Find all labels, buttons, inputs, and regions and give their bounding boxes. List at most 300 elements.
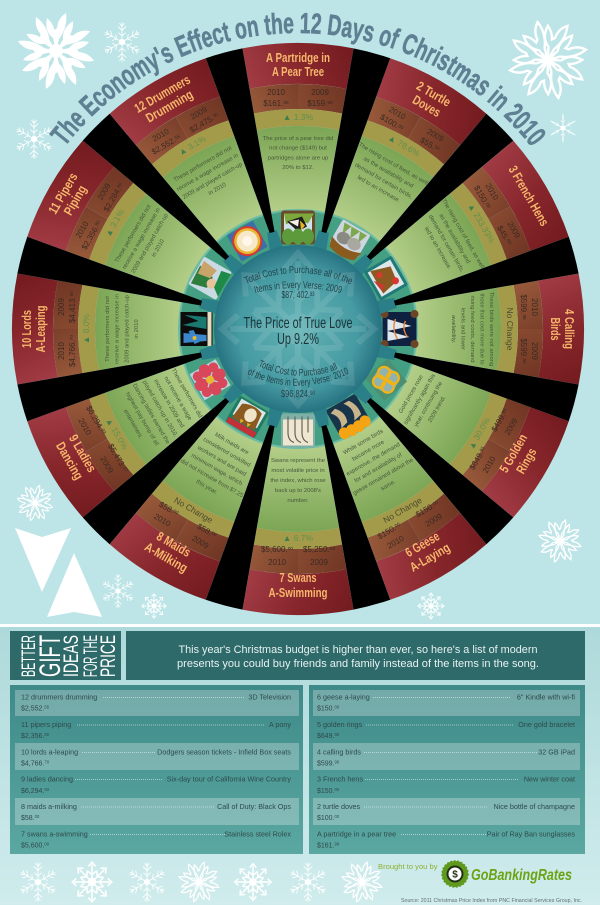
icon: drum: [227, 221, 268, 262]
row: 6 geese: $150.: [317, 706, 335, 712]
prices: 00: [210, 530, 218, 539]
label: A-Laying: [407, 540, 453, 575]
description: workers and are paid: [195, 445, 247, 478]
prices: [263, 88, 333, 108]
icon: calling birds: [380, 310, 418, 348]
row: 7 swans: 00: [44, 842, 50, 846]
label: [19, 305, 48, 352]
icon: dancing ladies: [187, 357, 233, 403]
row: 12 drummers: 12 drummers drumming: [21, 692, 97, 702]
description: considered unskilled: [202, 437, 251, 469]
row: 3 hens: New winter coat: [524, 774, 575, 784]
prices: $100.: [378, 112, 400, 130]
row: partridge: 99: [335, 842, 340, 846]
row: 3 hens: $150.: [317, 788, 335, 795]
label: A-Milking: [142, 539, 190, 575]
prices: 2010: [268, 558, 286, 567]
prices: 2010: [387, 105, 408, 122]
prices: 99: [283, 100, 289, 106]
description: [174, 424, 265, 508]
row: 5 rings: $649.: [317, 733, 335, 740]
prices: 00: [484, 202, 492, 210]
snowflakes: bottom row: [19, 862, 382, 902]
percent change: No Change: [505, 307, 515, 351]
prices: 00: [432, 499, 440, 507]
prices: 2010: [481, 454, 498, 475]
description: significantly again this: [403, 373, 437, 426]
row: 2 doves: 00: [335, 814, 340, 819]
prices: 80: [116, 181, 124, 189]
prices: [151, 500, 218, 552]
gift list: left column: [10, 685, 303, 854]
prices: 2010: [152, 512, 173, 529]
label: [407, 78, 454, 122]
description: Dancing ladies earned the: [131, 383, 171, 446]
prices: $2,284.: [102, 186, 123, 213]
central headline: The Price of True Love: [244, 315, 353, 332]
description: minimum wage, which: [190, 453, 243, 487]
row: 12 drummers: $2,552.: [21, 706, 44, 712]
central headline: [244, 315, 353, 348]
label: [496, 431, 543, 483]
row: 4 birds: [317, 748, 575, 768]
row: 7 swans: 7 swans a-swimming: [21, 830, 88, 838]
prices: [376, 499, 447, 552]
label: Birds: [548, 318, 563, 340]
description: Gold prices rose: [398, 374, 425, 415]
prices: 00: [330, 546, 335, 552]
label: 12 Drummers: [132, 72, 193, 116]
description: 2009 trend.: [427, 395, 448, 424]
description: entertainers.: [122, 409, 144, 440]
description: year, continuing the: [413, 380, 445, 428]
prices: $5,600.: [261, 545, 288, 554]
percent change: ▲ 6.7%: [283, 533, 314, 543]
description: highest pay bump of all: [124, 392, 159, 447]
prices: 30: [212, 112, 220, 120]
prices: $599.: [519, 338, 528, 358]
prices: $4,413.: [68, 296, 77, 323]
description: [415, 198, 485, 284]
row: 8 maids: [21, 802, 291, 822]
heading block: better gift ideas: [10, 631, 121, 680]
row: 3 hens: [317, 774, 575, 795]
icon: partridge and pears: [281, 210, 315, 244]
prices: 2009: [57, 298, 66, 316]
description: increase in 2009 and: [152, 379, 185, 429]
row: 2 doves: 2 turtle doves: [317, 802, 361, 811]
prices: 93: [99, 428, 107, 436]
prices: 95: [501, 407, 509, 415]
segment: 12 Drummers Drumming: [107, 54, 303, 282]
percent change: ▲ 8.0%: [81, 313, 91, 344]
description: in 2010: [208, 182, 228, 197]
row: 8 maids: $58.: [21, 815, 35, 822]
row: 5 rings: 95: [335, 732, 340, 737]
prices: $4,766.: [68, 340, 77, 367]
row: 4 birds: 96: [335, 760, 340, 764]
prices: 2009: [190, 534, 211, 551]
prices: $5,250.: [303, 545, 330, 554]
prices: 2010: [57, 342, 66, 360]
prices: 80: [94, 219, 102, 227]
total cost 2010: $96,824.: [281, 389, 320, 400]
wheel: [12, 42, 584, 616]
description: [171, 144, 249, 210]
label: 9 Ladies: [66, 432, 100, 475]
label: 11 Pipers: [45, 170, 81, 216]
row: 11 pipers: A pony: [269, 720, 291, 729]
percent change: ▲ 233.33%: [466, 201, 497, 245]
icon ring base: [177, 208, 419, 450]
row: 2 doves: [317, 802, 575, 822]
prices: 96: [521, 314, 527, 320]
prices: 2010: [151, 127, 171, 144]
prices: [145, 101, 221, 157]
segment: A Partridge in a Pear Tree: [242, 43, 354, 244]
description: These performers did not: [173, 145, 233, 184]
description: [395, 368, 454, 436]
segment: 8 Maids A-Milking: [107, 376, 303, 604]
row: 9 ladies: 93: [44, 787, 50, 792]
prices: $150.: [472, 184, 490, 206]
row: 12 drummers: [21, 692, 291, 712]
heading block: better gift ideas: IDEAS: [60, 635, 83, 677]
description: this year.: [195, 479, 219, 496]
segment: 7 Swans A-Swimming: [242, 414, 354, 615]
label: [132, 72, 200, 128]
description: led to an increase.: [356, 175, 401, 204]
description: those that cost more due to: [478, 293, 484, 365]
description: as the availability and: [362, 156, 414, 190]
row: partridge: Pair of Ray Ban sunglasses: [487, 830, 575, 838]
row: partridge: A partridge in a pear tree: [317, 830, 396, 838]
row: 10 lords: 10 lords a-leaping: [21, 748, 78, 756]
description: [263, 136, 333, 171]
label: [53, 432, 100, 482]
row: 4 birds: 4 calling birds: [317, 748, 361, 756]
label: Dancing: [53, 439, 87, 482]
row: 2 doves: Nice bottle of champagne: [493, 802, 575, 811]
description: These performers did: [170, 368, 203, 419]
segment: 5 Golden Rings: [342, 322, 573, 520]
icon: french hens: [364, 256, 408, 301]
prices: 60: [69, 291, 75, 296]
prices: 00: [172, 508, 180, 517]
bottom section background: [0, 624, 600, 905]
heading block: better gift ideas: PRICE: [97, 635, 120, 677]
prices: 2010: [386, 534, 406, 551]
prices: $2,475.: [188, 113, 216, 135]
prices: $161.: [263, 99, 283, 108]
percent change: ▲ 3.1%: [103, 207, 126, 239]
row: 5 rings: [317, 720, 575, 740]
label: [142, 526, 198, 575]
label: 8 Maids: [154, 528, 194, 560]
intro banner: presents you could buy friends and family instead of the items in the song.: [177, 658, 539, 670]
description: levels and lower: [460, 308, 466, 350]
row: 9 ladies: [21, 774, 291, 795]
label: [45, 170, 93, 223]
row: 9 ladies: Six-day tour of California Wine Country: [167, 774, 291, 784]
description: The price of a pear tree did: [263, 136, 333, 142]
logo: GoBankingRates: [442, 861, 572, 887]
segment: 4 Calling Birds: [380, 274, 584, 384]
prices: 2009: [310, 558, 328, 567]
total cost 2009: 83: [310, 292, 315, 298]
description: [450, 292, 494, 366]
central headline: Up 9.2%: [277, 331, 319, 348]
description: partridges alone are up: [268, 155, 329, 161]
label: A-Leaping: [33, 305, 48, 352]
label: [399, 527, 453, 575]
description: did not increase from $7.25: [179, 458, 245, 500]
total cost 2010: Total Cost to Purchase all: [260, 360, 338, 376]
row: 6 geese: 6" Kindle with wi-fi: [517, 692, 575, 702]
prices: 96: [521, 358, 527, 364]
description: 20% to $12.: [282, 165, 314, 171]
row: 7 swans: [21, 830, 291, 850]
total cost 2010: of the Items in Every Verse: 2010: [248, 368, 348, 388]
prices: 2009: [505, 220, 522, 240]
icon: leaping lords: [180, 312, 212, 346]
prices: 2010: [530, 298, 539, 316]
prices: 2009: [424, 512, 444, 529]
prices: 00: [505, 238, 513, 246]
label: 4 Calling: [562, 309, 577, 349]
label: A-Swimming: [268, 585, 328, 600]
logo: GoBankingRates: GoBankingRates: [471, 867, 572, 884]
centre disc: [214, 245, 382, 413]
prices: 2010: [267, 88, 285, 97]
description: became more: [351, 439, 386, 463]
description: demand for certain birds,: [427, 214, 465, 274]
percent change: No Change: [172, 495, 215, 525]
description: [270, 458, 326, 504]
brought to you by: Brought to you by: [378, 862, 438, 871]
row: 3 hens: 3 French hens: [317, 774, 363, 784]
percent change: ▲ 3.1%: [176, 133, 208, 157]
segment: 3 French Hens: [344, 138, 573, 334]
prices: $2,552.: [150, 135, 178, 157]
total cost 2010: 90: [310, 391, 315, 397]
prices: $2,356.: [80, 224, 101, 251]
label: 2 Turtle: [414, 78, 454, 110]
prices: [378, 103, 447, 154]
heading block: better gift ideas: FOR THE: [81, 635, 102, 677]
icon: golden rings: [360, 353, 412, 406]
row: 4 birds: $599.: [317, 760, 335, 768]
row: 10 lords: 70: [44, 760, 50, 764]
prices: 2009: [503, 416, 520, 437]
description: geese remained about the: [352, 457, 415, 497]
prices: 2010: [74, 219, 91, 240]
prices: 55: [174, 134, 182, 142]
row: 11 pipers: 11 pipers piping: [21, 720, 71, 729]
prices: $58.: [157, 500, 175, 515]
percent change: ▲ 30.0%: [466, 416, 492, 451]
label: Rings: [513, 445, 539, 476]
label: 5 Golden: [496, 431, 530, 475]
percent change: ▲ 78.6%: [386, 132, 422, 159]
prices: [519, 294, 539, 364]
label: A Partridge in: [266, 50, 330, 65]
row: partridge: [317, 830, 575, 850]
prices: $499.: [490, 412, 508, 433]
prices: $649.: [468, 450, 486, 472]
segment: 9 Ladies Dancing: [23, 323, 253, 520]
label: 10 Lords: [19, 310, 34, 348]
row: 6 geese: 00: [335, 704, 340, 710]
heading block: better gift ideas: GIFT: [34, 635, 67, 677]
description: availability.: [450, 315, 456, 344]
row: 6 geese: [317, 692, 575, 712]
prices: 00: [288, 546, 293, 552]
row: 12 drummers: 3D Television: [248, 692, 291, 702]
description: back up to 2008's: [275, 488, 321, 494]
description: most volatile price in: [271, 468, 325, 474]
label: [266, 50, 330, 79]
row: 10 lords: $4,766.: [21, 760, 44, 768]
segment: 11 Pipers Piping: [23, 138, 252, 334]
prices: $150.: [414, 501, 436, 519]
title: The Economy's Effect on the 12 Days of Christmas in 2010: [49, 12, 546, 145]
row: 2 doves: $100.: [317, 815, 335, 822]
description: in 2010: [134, 319, 140, 339]
row: 8 maids: 8 maids a-milking: [21, 802, 77, 811]
prices: [57, 291, 77, 367]
row: partridge: $161.: [317, 842, 335, 850]
row: 12 drummers: 55: [44, 704, 50, 710]
prices: $45.: [495, 224, 511, 242]
description: [113, 362, 206, 456]
segment: 6 Geese A-Laying: [292, 374, 489, 604]
description: demand for certain birds,: [354, 162, 413, 200]
description: not receive a wage: [162, 376, 193, 422]
segment: 2 Turtle Doves: [292, 54, 489, 284]
description: as the availability and: [437, 213, 471, 265]
row: 8 maids: Call of Duty: Black Ops: [217, 802, 291, 811]
prices: $58.: [195, 522, 213, 537]
label: 3 French Hens: [506, 163, 552, 229]
label: [548, 309, 577, 349]
label: 7 Swans: [280, 570, 316, 585]
total cost 2009: Items in Every Verse: 2009: [254, 281, 342, 293]
description: 2009 and played catch-up: [131, 212, 170, 275]
row: 10 lords: Dodgers season tickets - Infield Box seats: [157, 748, 291, 756]
source note: Source: 2011 Christmas Price Index from PNC Financial Services Group, Inc.: [401, 898, 582, 904]
row: 8 maids: 00: [35, 814, 40, 819]
description: number.: [287, 498, 309, 504]
snowflakes: top and around the wheel: [15, 13, 595, 619]
description: played catch-up in 2010.: [141, 380, 178, 439]
description: Swans represent the: [271, 458, 326, 464]
label: Drumming: [143, 86, 196, 125]
description: [105, 294, 140, 364]
description: Milk maids are: [214, 432, 250, 457]
prices: $5,473.: [106, 442, 127, 470]
prices: 00: [394, 521, 402, 529]
description: These performers did not: [105, 296, 111, 362]
total cost 2010: [248, 360, 348, 400]
logo: GoBankingRates: $: [452, 870, 458, 880]
description: the index, which rose: [270, 478, 326, 484]
prices: 07: [121, 466, 129, 474]
icon: cow and milking: [225, 395, 269, 438]
description: The rising cost of feed, as well: [357, 142, 429, 187]
row: 7 swans: $5,600.: [21, 842, 44, 850]
description: not change ($149) but: [269, 146, 327, 152]
description: expensive, the demand: [346, 442, 401, 478]
row: 3 hens: 00: [335, 787, 340, 792]
description: in 2010: [151, 238, 166, 258]
prices: $6,294.: [84, 404, 105, 432]
row: 4 birds: 32 GB iPad: [538, 748, 575, 756]
arrows: white notched triangles: [15, 528, 102, 617]
prices: 2009: [98, 455, 115, 475]
prices: 70: [69, 335, 75, 340]
label: 6 Geese: [402, 528, 442, 560]
total cost 2009: [244, 266, 352, 301]
row: 9 ladies: 9 ladies dancing: [21, 774, 73, 784]
prices: 2009: [96, 181, 113, 202]
icon: geese and eggs: [325, 393, 373, 442]
description: led to an increase.: [423, 226, 452, 271]
description: rising feed costs, demand: [469, 295, 475, 363]
prices: 2010: [76, 417, 93, 437]
prices: 99: [433, 144, 441, 152]
label: A Pear Tree: [272, 64, 324, 79]
description: [332, 422, 420, 505]
prices: $159.: [307, 99, 327, 108]
percent change: ▲ 15.0%: [104, 416, 130, 451]
row: 11 pipers: 80: [44, 732, 50, 737]
gift list: right column: [309, 685, 585, 854]
description: These performers did not: [114, 204, 153, 264]
prices: [472, 178, 523, 247]
icon: swans: [281, 414, 315, 448]
prices: $150.: [376, 523, 398, 541]
row: 7 swans: Stainless steel Rolex: [224, 830, 291, 838]
prices: [73, 404, 130, 481]
description: These birds were not among: [488, 292, 494, 366]
row: 5 rings: One gold bracelet: [518, 720, 575, 729]
black wedges between segments: [17, 48, 579, 610]
prices: $599.: [519, 294, 528, 314]
label: Doves: [410, 92, 443, 120]
description: The rising cost of feed, as well: [440, 198, 485, 270]
row: 11 pipers: $2,356.: [21, 733, 44, 740]
description: 2009 and played catch-up: [182, 161, 244, 201]
description: [113, 202, 179, 280]
prices: $55.: [418, 136, 436, 151]
row: 9 ladies: $6,294.: [21, 788, 44, 795]
percent change: ▲ 1.3%: [283, 112, 314, 122]
prices: 00: [397, 123, 405, 131]
prices: [261, 545, 335, 567]
prices: [468, 407, 522, 478]
description: same.: [380, 479, 397, 492]
total cost 2009: $87, 402.: [282, 290, 323, 301]
icon: pipers: [188, 256, 232, 300]
prices: 99: [327, 100, 333, 106]
label: [268, 570, 328, 600]
percent change: No Change: [381, 495, 424, 525]
description: 2009 and played catch-up: [124, 294, 130, 363]
row: 6 geese: 6 geese a-laying: [317, 692, 370, 702]
label: Piping: [61, 183, 90, 218]
icon: turtle doves in nest: [326, 219, 371, 264]
